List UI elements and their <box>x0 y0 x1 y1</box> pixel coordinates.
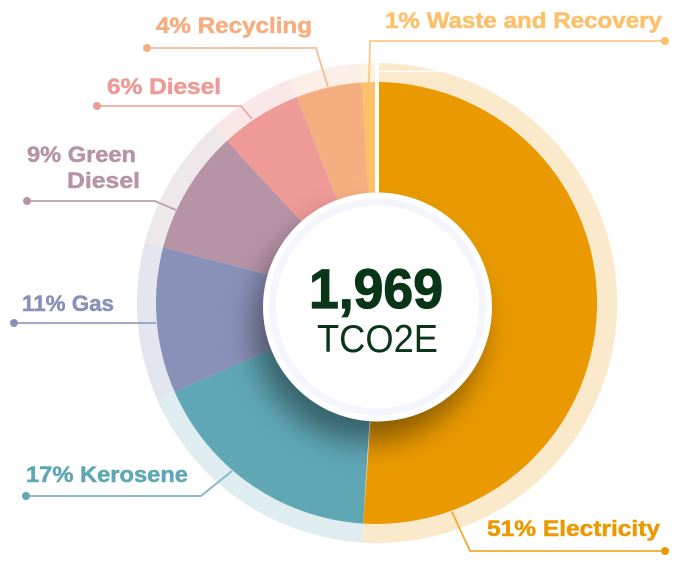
callout: 6% Diesel: 6% Diesel <box>107 74 221 99</box>
callout: 11% Gas <box>10 291 156 327</box>
callout: 1% Waste and Recovery <box>369 8 669 82</box>
callout: 17% Kerosene <box>22 462 232 500</box>
pie slice: Electricity 51% <box>363 82 597 524</box>
pie slice: Green Diesel 9% <box>163 141 377 303</box>
callout: 51% Electricity <box>452 512 669 555</box>
centre badge <box>263 192 492 422</box>
callout: 17% Kerosene: 17% Kerosene <box>26 462 188 487</box>
callout: 11% Gas: 11% Gas <box>22 291 114 316</box>
callout: 4% Recycling <box>143 13 328 87</box>
callout: 9% Green Diesel: Diesel <box>67 168 140 193</box>
pie slice: Kerosene 17% <box>175 303 377 524</box>
unit label: TCO2E <box>317 318 438 361</box>
total value: 1,969 <box>309 257 443 320</box>
pie slice: Diesel 6% <box>227 97 377 303</box>
callout: 4% Recycling: 4% Recycling <box>156 13 312 38</box>
shadow under centre circle <box>254 214 482 442</box>
pie slice: Gas 11% <box>156 247 377 392</box>
pie slice: Recycling 4% <box>297 82 377 303</box>
outer ring: pale tinted band <box>137 63 617 543</box>
callout: 9% Green Diesel: 9% Green <box>27 142 136 167</box>
callout: 1% Waste and Recovery: 1% Waste and Recovery <box>385 8 663 33</box>
callout: 6% Diesel <box>93 74 252 119</box>
pie slice: Waste and Recovery 1% <box>362 82 375 303</box>
callout: 9% Green Diesel <box>23 142 176 210</box>
callout: 51% Electricity: 51% Electricity <box>487 516 661 541</box>
